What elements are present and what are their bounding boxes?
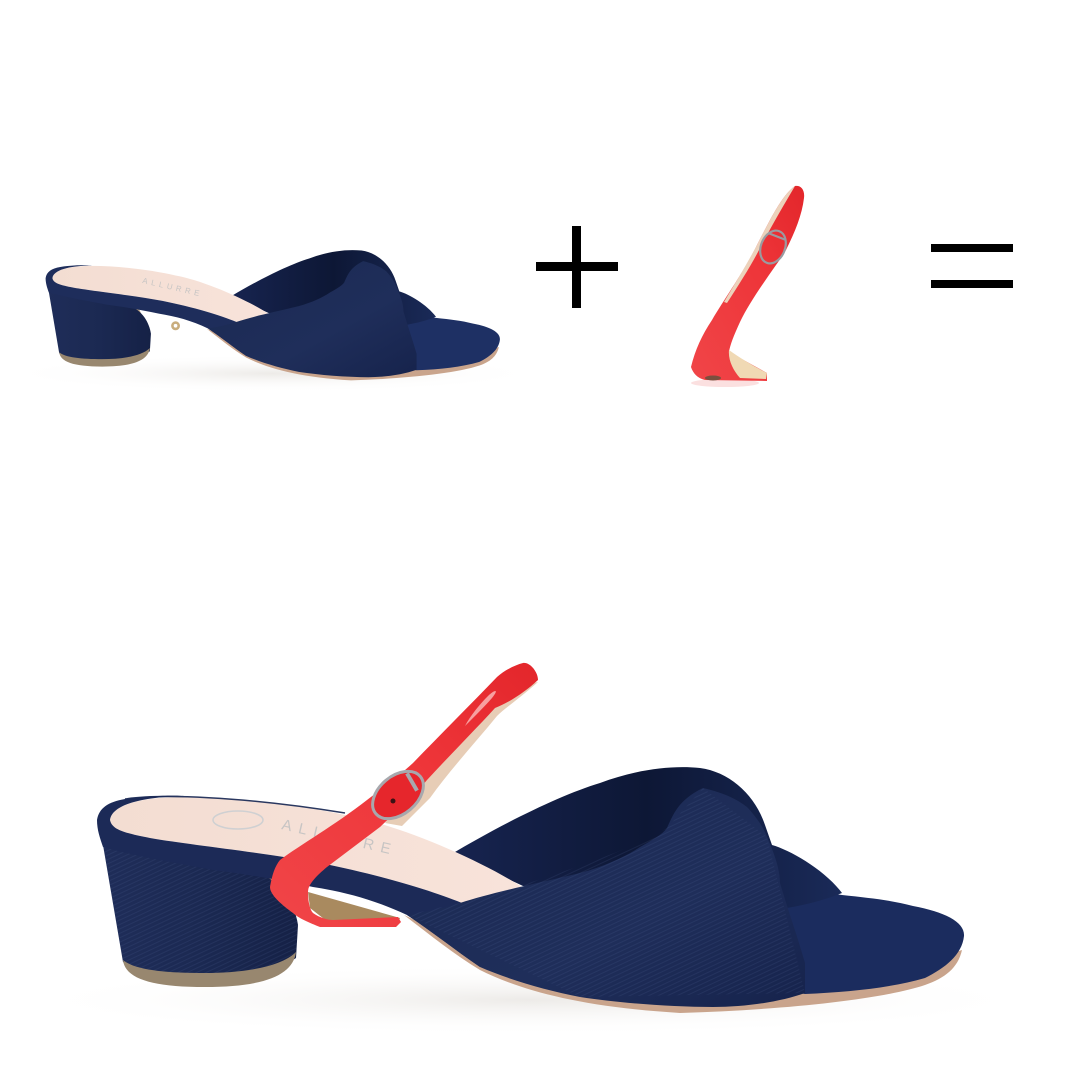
cream front lining: [729, 350, 767, 379]
inner lining: [450, 767, 842, 908]
strap upper: [270, 663, 538, 927]
sole edge: [404, 915, 962, 1013]
patent highlight: [465, 691, 496, 726]
heel block: [49, 291, 151, 361]
equals sign: [931, 244, 1013, 288]
strap lining: [724, 186, 795, 303]
shadow: [10, 964, 1050, 1036]
front upper: [407, 788, 805, 1007]
sole edge: [206, 328, 499, 380]
buckle: [364, 762, 432, 828]
brand logo mark: [213, 811, 263, 829]
front upper: [208, 261, 417, 377]
shadow: [0, 354, 545, 393]
red strap accessory: [691, 186, 804, 387]
collar band: [46, 265, 257, 356]
strap lining: [385, 682, 538, 826]
tan pad under arch: [205, 864, 282, 892]
denim texture: [407, 788, 805, 997]
inner lining: [231, 250, 436, 325]
insole rim line: [125, 797, 345, 813]
insole: [52, 266, 268, 322]
large combined shoe: [10, 663, 1050, 1036]
strap tan underside: [308, 892, 400, 926]
brand mark on insole: ALLURRE: [142, 276, 204, 299]
insole: [110, 797, 522, 903]
floor shadow: [691, 379, 759, 387]
heel block: [103, 845, 298, 976]
buckle: [756, 227, 790, 267]
open toe footbed: [770, 885, 964, 994]
small pin: [172, 323, 179, 329]
strap body: [691, 186, 804, 381]
tan pad under arch: [102, 301, 143, 316]
heel texture: [103, 845, 298, 976]
sole rivet: [705, 376, 721, 380]
heel cap: [59, 348, 150, 367]
plus sign: [536, 226, 618, 308]
brand text: ALLURRE: [280, 816, 399, 859]
red strap on shoe: [270, 663, 538, 927]
collar band: [97, 796, 500, 967]
heel cap: [123, 952, 296, 987]
open toe footbed: [398, 313, 500, 370]
small denim slide shoe: [0, 250, 545, 393]
